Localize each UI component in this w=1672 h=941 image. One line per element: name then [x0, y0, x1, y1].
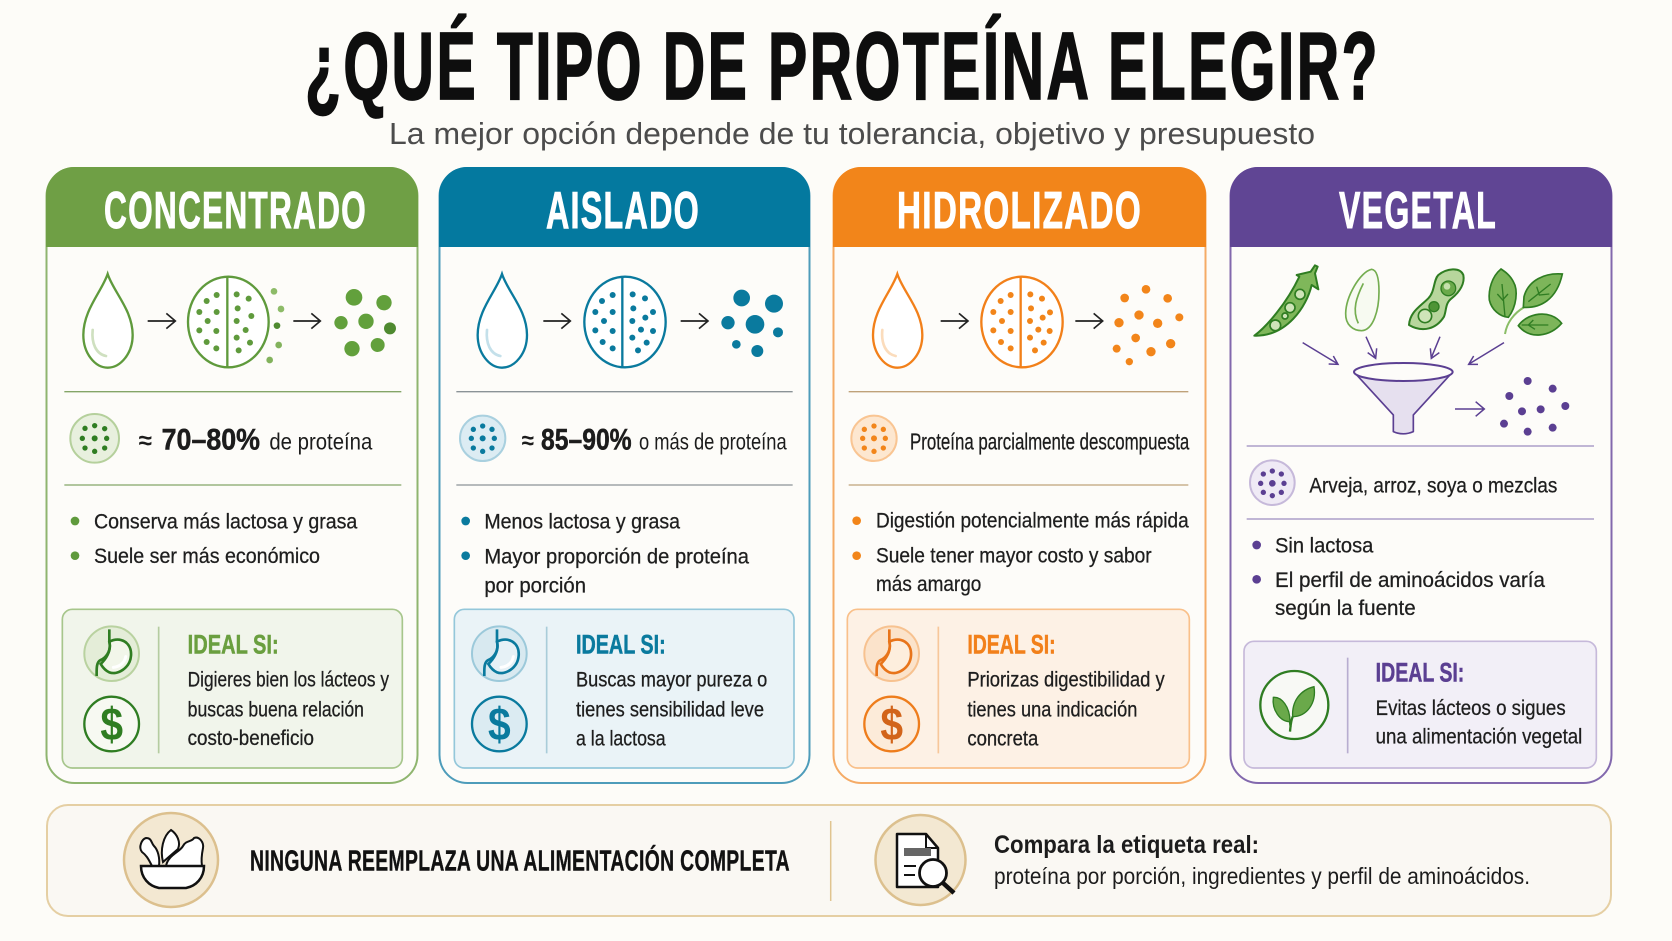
header: concentrado: [46, 167, 418, 247]
header: hidrolizado: HIDROLIZADO: [897, 182, 1142, 240]
header: vegetal: [1230, 167, 1612, 247]
ideal box: hidrolizado: tienes una indicación: [967, 699, 1137, 722]
ideal box: aislado: tienes sensibilidad leve: [576, 699, 764, 722]
ideal box: concentrado: costo-beneficio: [188, 727, 314, 750]
ideal box: vegetal: Evitas lácteos o sigues: [1376, 697, 1566, 720]
icon: dollar: [472, 697, 527, 751]
protein description: hidrolizado: Proteína parcialmente descompuesta: [910, 428, 1189, 454]
ideal box: vegetal: IDEAL SI:: [1376, 658, 1464, 688]
ideal box: hidrolizado: concreta: [967, 728, 1039, 751]
arrows into funnel: [1303, 337, 1504, 364]
icon: soybean pod: [1409, 269, 1464, 329]
ideal box: aislado: a la lactosa: [576, 728, 666, 751]
banner text: compara la etiqueta: proteína por porción, ingredientes y perfil de aminoácidos.: [994, 863, 1530, 889]
benefits list: vegetal: [1252, 535, 1545, 620]
ideal box: aislado: [454, 609, 794, 768]
benefits list: concentrado: Conserva más lactosa y grasa: [94, 510, 358, 533]
icon: leaves: [1489, 269, 1562, 335]
benefits list: vegetal: Sin lactosa: [1275, 535, 1374, 558]
protein sources: vegetal: Arveja, arroz, soya o mezclas: [1309, 474, 1557, 497]
benefits list: aislado: [461, 510, 749, 597]
panel: vegetal: [1230, 167, 1612, 783]
ideal box: hidrolizado: [847, 609, 1189, 768]
subtitle: La mejor opción depende de tu tolerancia, objetivo y presupuesto: [389, 116, 1315, 151]
panel: concentrado: [46, 167, 418, 783]
banner text: compara la etiqueta: Compara la etiqueta real:: [994, 831, 1259, 859]
ideal box: hidrolizado: IDEAL SI:: [967, 629, 1056, 659]
ideal box: vegetal: [1244, 641, 1596, 768]
process diagram: concentrado: [83, 274, 396, 368]
protein percentage: concentrado: de proteína: [269, 428, 372, 454]
ideal box: concentrado: [62, 609, 402, 768]
icon: leaf: [1260, 671, 1328, 739]
header: vegetal: VEGETAL: [1339, 182, 1497, 240]
protein percentage: aislado: [456, 392, 793, 485]
icon: funnel: [1354, 363, 1453, 434]
banner text: alimentación completa: NINGUNA REEMPLAZA UNA ALIMENTACIÓN COMPLETA: [250, 844, 790, 878]
process diagram: hidrolizado: [873, 274, 1183, 368]
benefits list: aislado: Menos lactosa y grasa: [484, 510, 680, 533]
ideal box: hidrolizado: Priorizas digestibilidad y: [967, 669, 1165, 692]
banner text: compara la etiqueta: [994, 831, 1530, 889]
header: aislado: AISLADO: [546, 182, 700, 240]
benefits list: concentrado: [71, 510, 358, 568]
arrow out of funnel: [1455, 402, 1484, 416]
footer banner: [47, 805, 1611, 916]
benefits list: vegetal: El perfil de aminoácidos varía: [1275, 569, 1545, 592]
ideal box: concentrado: buscas buena relación: [188, 699, 364, 722]
protein description: hidrolizado: [849, 392, 1189, 485]
protein percentage: concentrado: ≈: [139, 428, 152, 455]
icon: label document with magnifier: [876, 815, 966, 905]
icon: stomach: [84, 626, 139, 681]
icon: dollar: [864, 697, 919, 751]
protein percentage: aislado: o más de proteína: [639, 428, 787, 454]
plant sources diagram: vegetal: [1254, 265, 1569, 436]
icon: dollar: $: [880, 698, 903, 750]
protein percentage: aislado: 85–90%: [541, 424, 632, 457]
benefits list: hidrolizado: Digestión potencialmente más rápida: [876, 510, 1189, 533]
ideal box: aislado: Buscas mayor pureza o: [576, 669, 767, 692]
ideal box: concentrado: Digieres bien los lácteos y: [188, 669, 389, 692]
icon: stomach: [864, 626, 919, 681]
benefits list: hidrolizado: más amargo: [876, 573, 981, 596]
benefits list: aislado: por porción: [484, 574, 586, 597]
protein percentage: concentrado: 70–80%: [162, 424, 260, 457]
header: hidrolizado: [833, 167, 1206, 247]
icon: salad bowl: [124, 813, 218, 907]
benefits list: aislado: Mayor proporción de proteína: [484, 545, 749, 568]
powder dots: [1500, 377, 1569, 436]
icon: stomach: [472, 626, 527, 681]
icon: dollar: $: [100, 698, 123, 750]
ideal box: vegetal: una alimentación vegetal: [1376, 725, 1582, 748]
header: aislado: [439, 167, 810, 247]
icon: dollar: $: [488, 698, 511, 750]
protein sources: vegetal: [1247, 446, 1594, 519]
protein percentage: concentrado: [64, 392, 401, 485]
panel: aislado: [439, 167, 810, 783]
panel: hidrolizado: [833, 167, 1206, 783]
benefits list: hidrolizado: [852, 510, 1189, 596]
icon: seed: [1346, 269, 1379, 331]
protein percentage: aislado: ≈: [522, 428, 534, 455]
benefits list: concentrado: Suele ser más económico: [94, 545, 320, 568]
header: concentrado: CONCENTRADO: [104, 182, 367, 240]
icon: dollar: [84, 697, 139, 751]
benefits list: hidrolizado: Suele tener mayor costo y sabor: [876, 545, 1152, 568]
icon: pea pod: [1254, 265, 1318, 336]
ideal box: concentrado: IDEAL SI:: [188, 629, 279, 659]
process diagram: aislado: [478, 274, 783, 368]
benefits list: vegetal: según la fuente: [1275, 597, 1416, 620]
ideal box: aislado: IDEAL SI:: [576, 629, 666, 659]
